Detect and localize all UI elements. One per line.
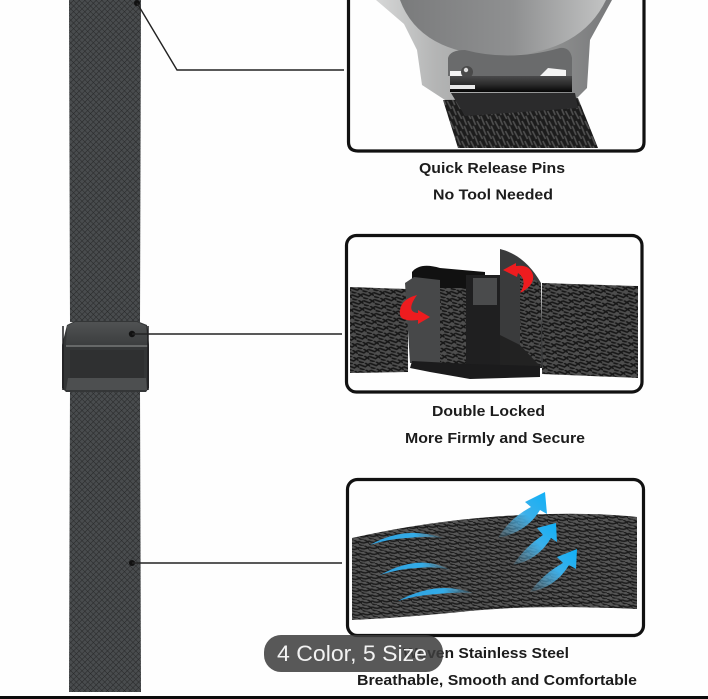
panel: double locked [346,236,642,392]
curved mesh band [352,514,637,620]
panel border [346,236,642,392]
left clasp plate [405,277,440,363]
clasp centre [412,266,485,290]
clasp lower bar [410,361,540,379]
color and size badge [264,635,443,672]
red arrow: left [400,295,430,324]
blue flow arrows left [370,533,473,601]
strap mesh [69,0,141,692]
panel: woven mesh [348,480,644,636]
folding clasp [62,321,149,392]
red arrow: right [503,263,533,293]
panel: quick release pins [348,0,644,151]
color and size badge: 4 Color, 5 Size [277,641,427,666]
caption: no tool needed: No Tool Needed [433,186,553,204]
watch strap [62,0,149,692]
bottom black bar [0,696,708,699]
caption: breathable, smooth and comfortable: Breathable, Smooth and Comfortable [357,672,637,689]
watch case back [400,0,606,56]
caption: more firmly and secure: More Firmly and Secure [405,430,585,447]
right mesh [542,283,638,378]
leader line: quick release pins [134,0,344,70]
leader line: woven steel [129,560,342,566]
panel border [348,480,644,636]
mesh strap [443,98,598,148]
caption: woven stainless steel: Woven Stainless Steel [403,645,569,662]
lug gap [448,48,572,76]
caption: quick release pins: Quick Release Pins [419,160,565,177]
quick release pin [461,66,473,78]
spring bar [450,76,572,92]
leader line: double locked [129,331,342,337]
watch case [376,0,612,100]
panel border [348,0,644,151]
caption: double locked: Double Locked [432,403,545,420]
right flap [500,249,543,367]
blue flow arrows right [498,492,577,592]
left mesh [350,287,408,373]
strap end piece [451,93,578,116]
